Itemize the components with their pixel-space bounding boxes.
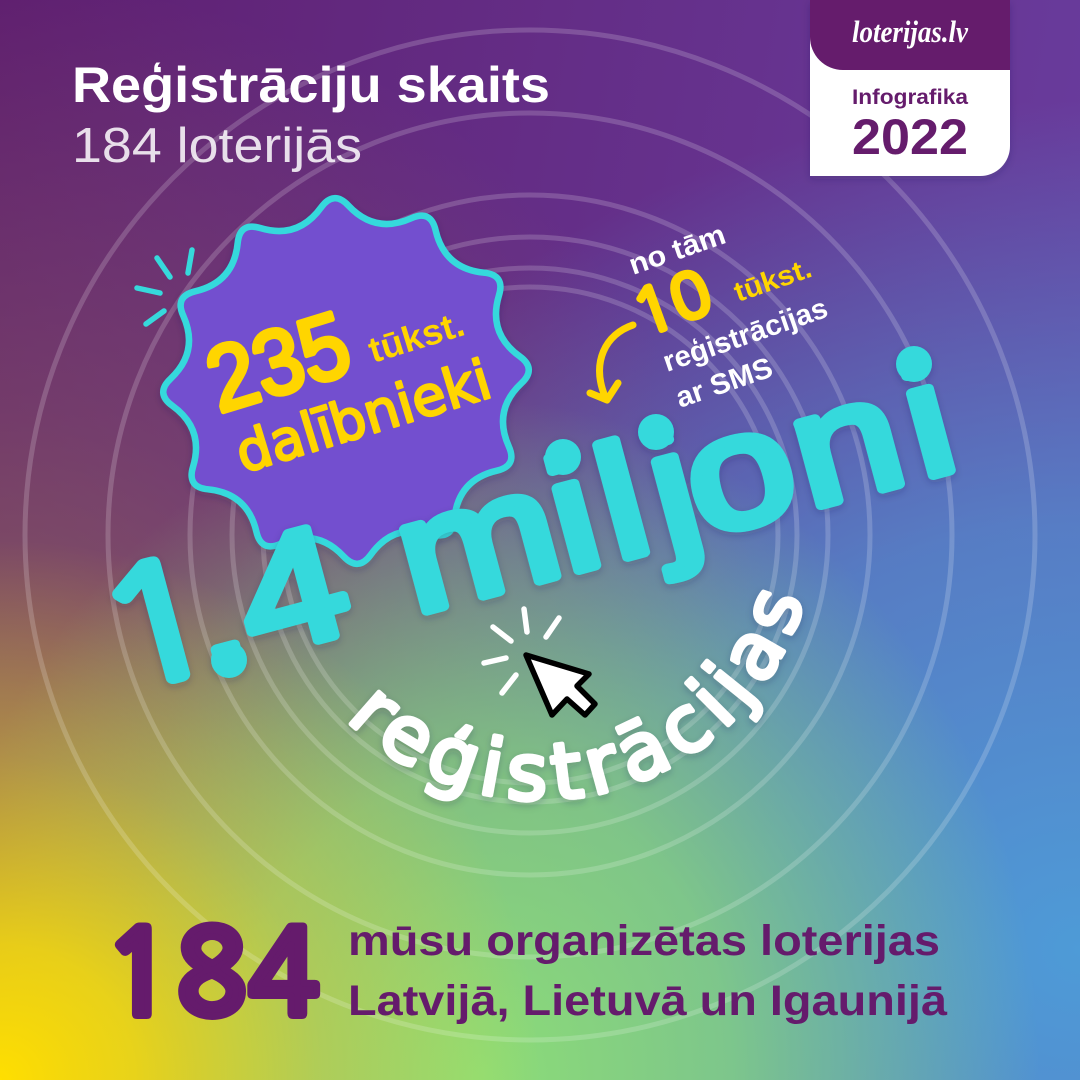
badge number: 235: 235 xyxy=(195,293,362,432)
bottom text: mūsu organizētas loterijas Latvijā, Lietuvā un Igaunijā xyxy=(348,917,948,1025)
badge: 235 tūkst. dalībnieki xyxy=(163,198,529,564)
bottom text: mūsu organizētas loterijas Latvijā, Lietuvā un Igaunijā: mūsu organizētas loterijas xyxy=(348,917,940,965)
title: Reģistrāciju skaits 184 loterijās: Reģistrāciju skaits xyxy=(72,57,550,113)
callout: no tām 10 tūkst. reģistrācijas ar SMS: tūkst. xyxy=(730,252,816,308)
card: Infografika 2022 xyxy=(810,0,1010,176)
icon: mouse cursor xyxy=(526,655,595,715)
badge unit: tūkst.: tūkst. xyxy=(363,303,469,371)
arrow: curved yellow down arrow xyxy=(590,325,633,400)
bottom text: mūsu organizētas loterijas Latvijā, Lietuvā un Igaunijā: Latvijā, Lietuvā un Igaunijā xyxy=(348,977,948,1025)
title: Reģistrāciju skaits 184 loterijās: 184 loterijās xyxy=(72,119,362,173)
bottom number: 184: 184 xyxy=(103,916,320,1033)
callout: no tām 10 tūkst. reģistrācijas ar SMS: no tām xyxy=(625,219,730,282)
callout: no tām 10 tūkst. reģistrācijas ar SMS xyxy=(625,219,832,415)
curved label: reģistrācijas: reģistrācijas xyxy=(347,590,804,808)
callout: no tām 10 tūkst. reģistrācijas ar SMS: 10 xyxy=(625,261,719,345)
logo: loterijas.lv: loterijas.lv xyxy=(852,14,969,49)
card year: 2022: 2022 xyxy=(852,109,968,165)
card label: Infografika: Infografika xyxy=(852,86,968,109)
title: Reģistrāciju skaits 184 loterijās xyxy=(72,57,550,173)
callout: no tām 10 tūkst. reģistrācijas ar SMS: ar SMS xyxy=(672,352,777,415)
callout: no tām 10 tūkst. reģistrācijas ar SMS: reģistrācijas xyxy=(659,292,832,379)
icon: click sparks xyxy=(484,609,559,693)
main figure: 1.4 miljoni: 1.4 miljoni xyxy=(80,328,971,727)
badge label: dalībnieki: dalībnieki xyxy=(228,347,498,485)
icon: teal sparks near badge xyxy=(137,250,192,324)
